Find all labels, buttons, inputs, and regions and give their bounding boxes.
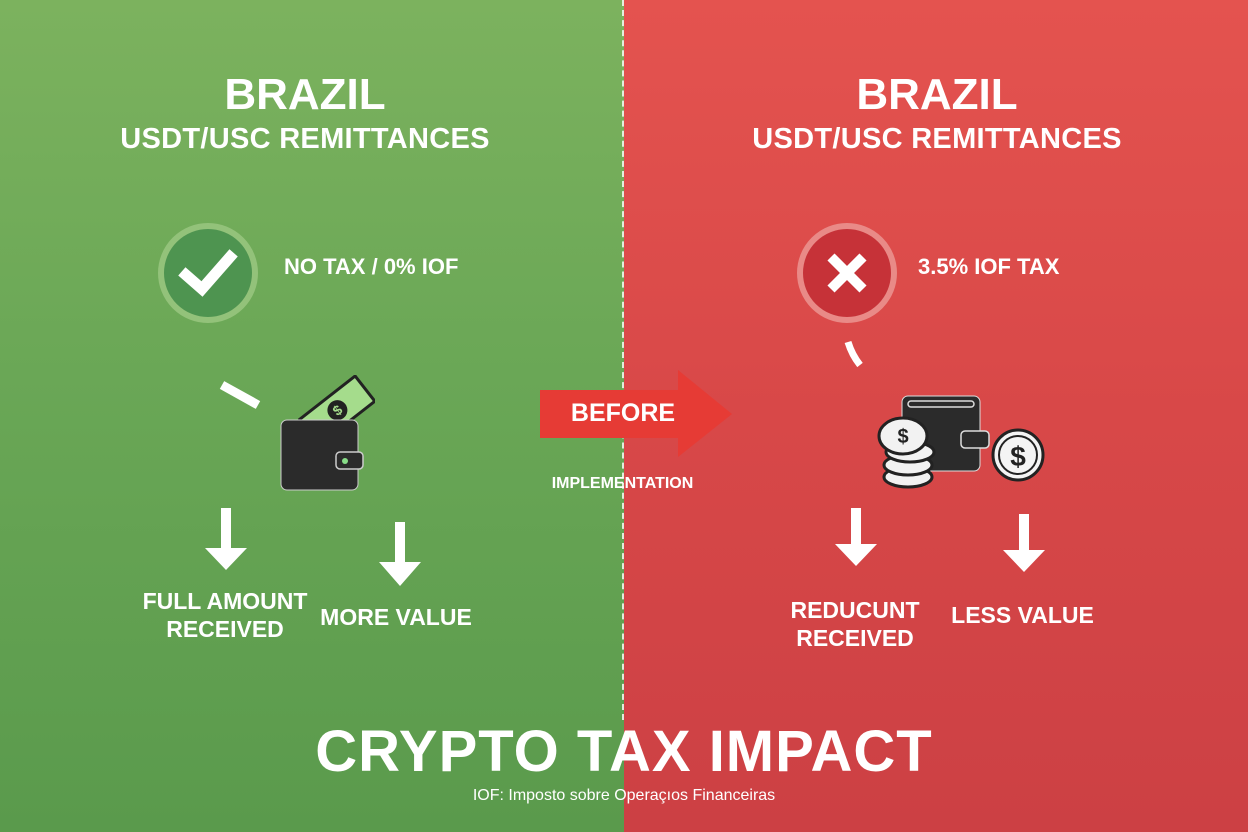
text: no tax: NO TAX / 0% IOF (284, 254, 458, 279)
divider dashed (622, 0, 624, 720)
text: before: BEFORE (571, 399, 675, 427)
label: more value: MORE VALUE (320, 604, 472, 630)
text: iof tax: 3.5% IOF TAX (918, 254, 1059, 279)
panel: right red (624, 0, 1248, 832)
icon: cross circle (797, 223, 897, 323)
arrows down right (835, 508, 1045, 572)
heading left: BRAZIL (224, 70, 386, 119)
title: CRYPTO TAX IMPACT (315, 719, 933, 784)
label: full amount (143, 588, 308, 642)
arrow: before (540, 370, 732, 457)
icon: wallet with bill: $ (329, 401, 346, 419)
icon: check circle (158, 223, 258, 323)
label: full amount: FULL AMOUNT (143, 588, 307, 614)
heading left: USDT/USC REMITTANCES (120, 123, 490, 155)
icon: wallet with coins: $ (897, 426, 909, 448)
panel: left green (0, 0, 624, 832)
icon: wallet with coins: $ (1010, 441, 1026, 472)
text: implementation: IMPLEMENTATION (552, 475, 693, 492)
label: reducunt: RECEIVED (796, 625, 914, 651)
label: reducunt: REDUCUNT (790, 597, 920, 623)
heading right (752, 70, 1122, 155)
heading right: BRAZIL (856, 70, 1018, 119)
label: full amount: RECEIVED (166, 616, 284, 642)
heading left (120, 70, 490, 155)
label: less value: LESS VALUE (951, 602, 1094, 628)
subtitle: IOF: Imposto sobre Operaçıos Financeiras (473, 787, 775, 804)
heading right: USDT/USC REMITTANCES (752, 123, 1122, 155)
icon: wallet with coins (844, 341, 1044, 488)
arrows down left (205, 508, 421, 586)
label: reducunt (790, 597, 920, 651)
icon: wallet with bill (220, 375, 375, 490)
